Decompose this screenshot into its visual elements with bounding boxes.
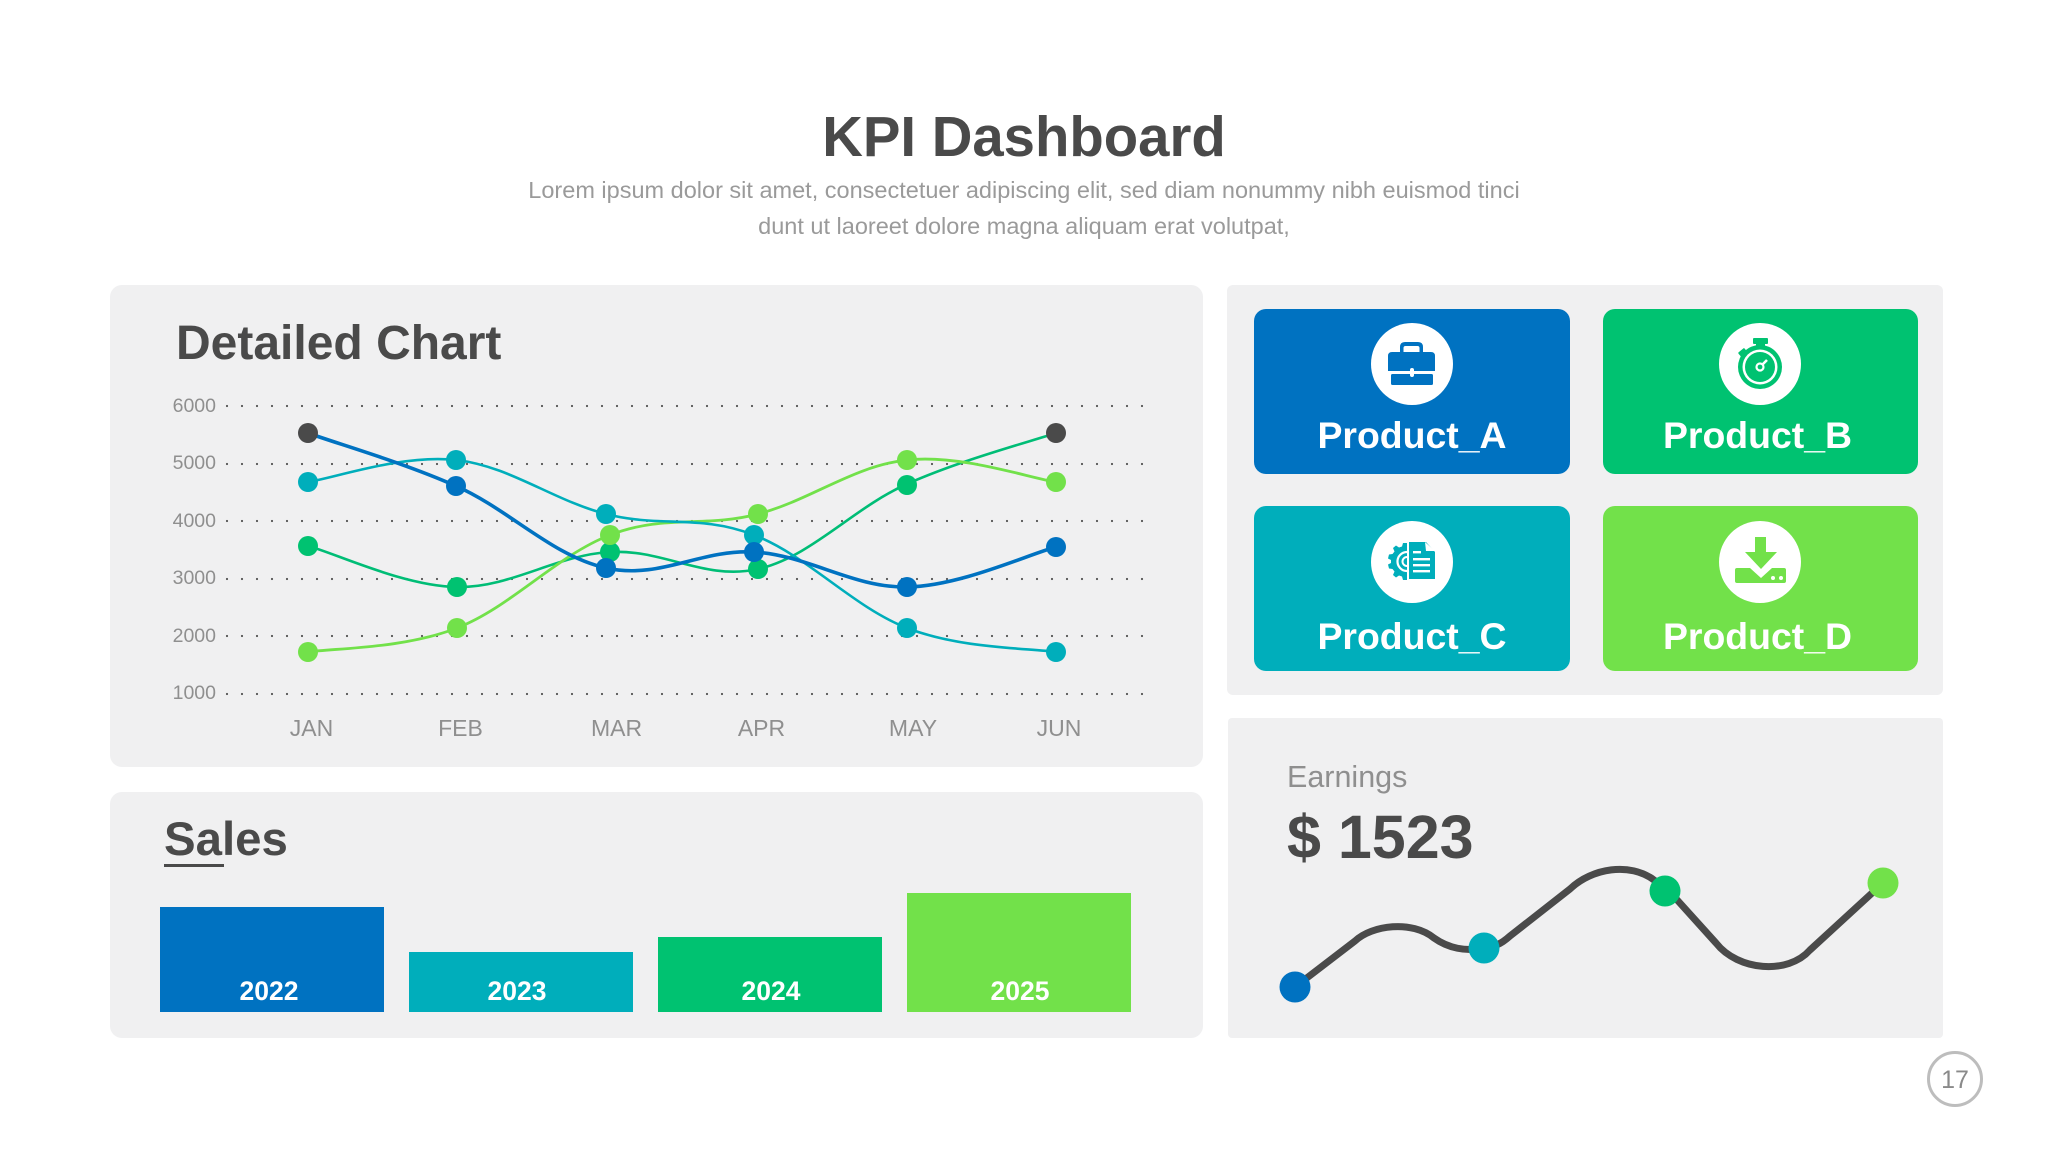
card: product C — [1254, 506, 1570, 671]
card: product D — [1603, 506, 1918, 671]
label: Product_A: Product_A — [1317, 414, 1507, 456]
bar 2022 — [160, 907, 384, 1012]
line series: lime — [308, 459, 1056, 652]
page number: 17 — [1941, 1066, 1969, 1094]
earnings marker: green — [1650, 876, 1680, 906]
value: earnings amount: $ 1523 — [1287, 803, 1474, 871]
panel: sales — [110, 792, 1203, 1038]
subtitle text block — [528, 177, 1520, 239]
y axis labels — [173, 395, 216, 704]
x axis labels: JUN — [1037, 715, 1081, 741]
earnings marker: blue — [1280, 972, 1310, 1002]
y axis labels: 1000 — [173, 682, 216, 704]
panel: earnings — [1228, 718, 1943, 1038]
y axis labels: 5000 — [173, 452, 216, 474]
bar 2024 — [658, 937, 882, 1012]
x axis labels: MAY — [889, 715, 937, 741]
bar 2025: 2025 — [991, 976, 1049, 1006]
label: Product_B: Product_B — [1663, 414, 1852, 456]
heading: sales: Sales — [164, 813, 288, 866]
y axis labels: 3000 — [173, 567, 216, 589]
title: KPI Dashboard — [822, 105, 1226, 168]
card: product A — [1254, 309, 1570, 474]
y axis labels: 2000 — [173, 625, 216, 647]
panel: detailed chart — [110, 285, 1203, 767]
y axis labels: 6000 — [173, 395, 216, 417]
label: Product_C: Product_C — [1317, 615, 1507, 657]
icon: stopwatch — [1719, 323, 1801, 405]
icon: gear and document — [1371, 521, 1453, 603]
line series: green — [308, 433, 1056, 587]
x axis labels: MAR — [591, 715, 642, 741]
bar 2023: 2023 — [488, 976, 546, 1006]
earnings marker: lime — [1868, 868, 1898, 898]
page number — [1928, 1052, 1982, 1106]
markers: teal series — [298, 450, 1066, 662]
x axis labels: APR — [738, 715, 785, 741]
line series: teal — [308, 459, 1056, 652]
bar 2025 — [907, 893, 1131, 1012]
heading: detailed chart: Detailed Chart — [176, 317, 501, 370]
x axis labels — [290, 715, 1081, 741]
markers: blue series — [298, 423, 1066, 597]
bar 2022: 2022 — [240, 976, 298, 1006]
subtitle text block: Lorem ipsum dolor sit amet, consectetuer adipiscing elit, sed diam nonummy nibh euismod tinci — [528, 177, 1520, 203]
icon: download — [1719, 521, 1801, 603]
x axis labels: FEB — [438, 715, 483, 741]
markers: lime series — [298, 450, 1066, 662]
subtitle text block: dunt ut laoreet dolore magna aliquam erat volutpat, — [758, 213, 1290, 239]
bar 2024: 2024 — [742, 976, 801, 1006]
bar 2023 — [409, 952, 633, 1012]
card: product B — [1603, 309, 1918, 474]
label: Product_D: Product_D — [1663, 615, 1852, 657]
label: earnings: Earnings — [1287, 760, 1407, 794]
heading underline — [164, 864, 224, 867]
line series: blue — [308, 433, 1056, 587]
earnings line chart — [1280, 868, 1898, 1002]
markers: green series — [298, 423, 1066, 597]
x axis labels: JAN — [290, 715, 333, 741]
icon: briefcase — [1371, 323, 1453, 405]
panel: products — [1227, 285, 1943, 695]
earnings marker: teal — [1468, 932, 1500, 964]
y axis labels: 4000 — [173, 510, 216, 532]
